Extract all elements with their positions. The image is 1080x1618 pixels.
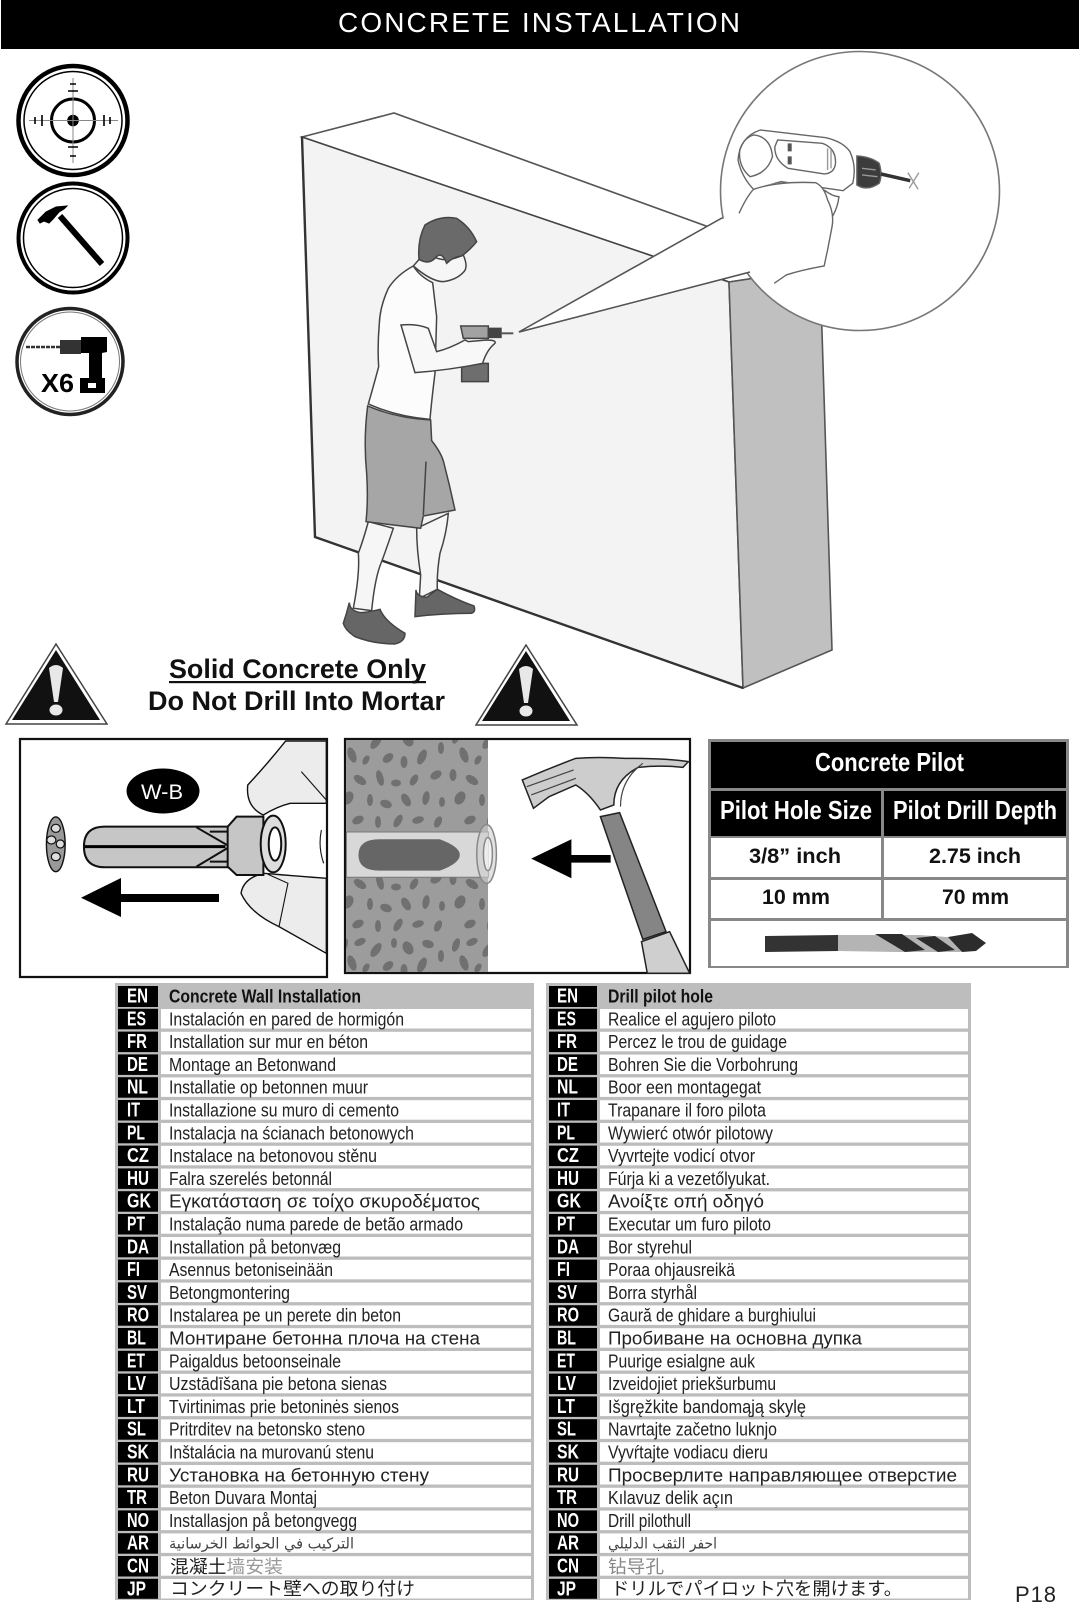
row RO: RO	[557, 1305, 579, 1327]
anchor body	[84, 822, 261, 870]
row ET: ET	[557, 1350, 575, 1372]
row FR: Percez le trou de guidage	[608, 1031, 787, 1052]
row SK	[549, 1442, 968, 1464]
row PT: Executar um furo piloto	[608, 1214, 771, 1234]
row EN: EN	[127, 986, 148, 1008]
row EN: Drill pilot hole	[608, 986, 713, 1006]
title banner	[1, 0, 1079, 49]
wall left edge	[302, 137, 743, 688]
arrow right panel	[531, 839, 611, 878]
row ET	[118, 1350, 531, 1372]
anchor collar	[228, 817, 263, 875]
warning heading	[148, 654, 445, 716]
legs	[353, 513, 448, 611]
title banner: CONCRETE INSTALLATION	[338, 7, 740, 38]
row DE: DE	[557, 1054, 578, 1076]
row SL	[549, 1419, 968, 1441]
shoes	[343, 589, 475, 644]
icon: target mark	[18, 66, 128, 175]
concrete cross-section	[346, 740, 488, 972]
row DA: DA	[557, 1236, 579, 1258]
row JP: コンクリート壁への取り付け	[170, 1579, 415, 1599]
fingers	[248, 741, 326, 815]
row AR	[118, 1533, 531, 1555]
value: 10 mm	[711, 880, 881, 918]
value: 2.75 inch	[884, 838, 1066, 877]
row LV	[118, 1373, 531, 1395]
row NO	[549, 1510, 968, 1532]
row GK	[118, 1191, 531, 1213]
warning heading: Do Not Drill Into Mortar	[148, 686, 445, 716]
row EN: Concrete Wall Installation	[169, 986, 361, 1006]
row JP	[118, 1578, 531, 1600]
hammer head	[522, 757, 688, 810]
row SV: Betongmontering	[169, 1282, 290, 1303]
row PL	[118, 1122, 531, 1144]
value: 70 mm	[884, 880, 1066, 918]
row IT	[549, 1100, 968, 1122]
row CN: CN	[127, 1556, 149, 1578]
row ET: ET	[127, 1350, 145, 1372]
row RO	[118, 1305, 531, 1327]
drilled hole	[46, 817, 65, 872]
face	[413, 255, 466, 282]
row PT: PT	[557, 1214, 575, 1236]
row NL	[549, 1077, 968, 1099]
row ES: Instalación en pared de hormigón	[169, 1008, 404, 1029]
row NO	[118, 1510, 531, 1532]
row GK	[549, 1191, 968, 1213]
value: 3/8 inch: 3/8” inch	[749, 845, 841, 868]
zoom cone	[519, 218, 750, 332]
row LT: Tvirtinimas prie betoninės sienos	[169, 1396, 399, 1417]
row JP: JP	[557, 1578, 576, 1600]
row NO: Installasjon på betongvegg	[169, 1510, 357, 1531]
table header: Concrete Pilot	[815, 747, 964, 777]
wall front face	[302, 137, 743, 688]
row LT: LT	[127, 1396, 145, 1418]
row AR: احفر الثقب الدليلي	[608, 1534, 717, 1554]
value: 3/8 inch	[711, 838, 881, 877]
table: concrete wall installation translations	[115, 983, 534, 1600]
row HU: Falra szerelés betonnál	[169, 1168, 332, 1189]
drill bit	[881, 174, 910, 181]
wall top face	[302, 113, 822, 282]
row PL: PL	[127, 1122, 145, 1144]
row SV: Borra styrhål	[608, 1282, 697, 1303]
row FR: FR	[557, 1031, 577, 1053]
row ES	[549, 1008, 968, 1030]
row LV: LV	[557, 1373, 577, 1395]
row CZ: CZ	[557, 1145, 579, 1167]
row PL: Wywierć otwór pilotowy	[608, 1122, 774, 1143]
row NO: Drill pilothull	[608, 1510, 691, 1531]
row LT: LT	[557, 1396, 575, 1418]
row FI: Poraa ohjausreikä	[608, 1259, 736, 1280]
row CZ: CZ	[127, 1145, 149, 1167]
row FI	[118, 1259, 531, 1281]
row LV: Izveidojiet priekšurbumu	[608, 1373, 776, 1394]
hammer grip	[641, 932, 690, 973]
row PT: Instalação numa parede de betão armado	[169, 1214, 463, 1234]
row DA	[549, 1236, 968, 1258]
row PL: PL	[557, 1122, 575, 1144]
row LT	[549, 1396, 968, 1418]
value: 2.75 inch: 2.75 inch	[929, 845, 1021, 868]
row FI: FI	[127, 1259, 140, 1281]
row TR: Kılavuz delik açın	[608, 1487, 733, 1508]
row PT	[549, 1214, 968, 1236]
badge: W-B: W-B	[141, 781, 183, 804]
warning heading: Solid Concrete Only	[169, 654, 426, 684]
row SL: Pritrditev na betonsko steno	[169, 1419, 365, 1440]
row LT: Išgręžkite bandomąją skylę	[608, 1396, 806, 1417]
warning icon right	[476, 645, 577, 725]
person drilling	[343, 217, 513, 644]
row BL: Пробиване на основна дупка	[608, 1328, 863, 1348]
row SL: Navrtajte začetno luknjo	[608, 1419, 777, 1440]
row HU: HU	[127, 1168, 149, 1190]
row DE	[549, 1054, 968, 1076]
icon: drill x6	[17, 308, 123, 414]
row AR: التركيب في الحوائط الخرسانية	[169, 1534, 354, 1554]
page number: P18	[1015, 1582, 1056, 1607]
row CZ: Vyvrtejte vodicí otvor	[608, 1145, 755, 1166]
hand	[654, 182, 833, 283]
row SV	[118, 1282, 531, 1304]
row FR	[118, 1031, 531, 1053]
row DE	[118, 1054, 531, 1076]
row ET	[549, 1350, 968, 1372]
badge: W-B	[126, 768, 200, 814]
panel: hammering anchor into concrete	[345, 739, 690, 973]
row ES: Realice el agujero piloto	[608, 1008, 776, 1029]
row NL: NL	[557, 1077, 578, 1099]
row ES	[118, 1008, 531, 1030]
row PL: Instalacja na ścianach betonowych	[169, 1122, 414, 1143]
row SK: SK	[127, 1442, 149, 1464]
row DA: Installation på betonvæg	[169, 1236, 341, 1257]
row DE: Bohren Sie die Vorbohrung	[608, 1054, 798, 1075]
row DA: Bor styrehul	[608, 1236, 692, 1257]
row CN: 混凝土墙安装	[170, 1557, 283, 1577]
row AR	[549, 1533, 968, 1555]
row NL: Boor een montagegat	[608, 1077, 761, 1098]
row RO: RO	[127, 1305, 149, 1327]
row EN: EN	[557, 986, 578, 1008]
row HU: HU	[557, 1168, 579, 1190]
row IT: IT	[557, 1100, 570, 1122]
row SV	[549, 1282, 968, 1304]
row BL	[118, 1328, 531, 1350]
row JP	[549, 1578, 968, 1600]
row JP: JP	[127, 1578, 146, 1600]
row SL: SL	[557, 1419, 576, 1441]
row DE: Montage an Betonwand	[169, 1054, 336, 1075]
row BL: BL	[557, 1328, 576, 1350]
anchor in hole	[346, 832, 488, 877]
column head: hole size: Pilot Hole Size	[720, 795, 872, 825]
row BL: Монтиране бетонна плоча на стена	[169, 1328, 481, 1348]
row ES: ES	[557, 1008, 576, 1030]
column head: hole size	[711, 791, 881, 836]
row FI	[549, 1259, 968, 1281]
arm	[401, 325, 495, 373]
row ES: ES	[127, 1008, 146, 1030]
row TR	[118, 1487, 531, 1509]
row RO: Instalarea pe un perete din beton	[169, 1305, 401, 1326]
row SK: SK	[557, 1442, 579, 1464]
row PL	[549, 1122, 968, 1144]
row SL	[118, 1419, 531, 1441]
row RO: Gaură de ghidare a burghiului	[608, 1305, 816, 1326]
row CN: CN	[557, 1556, 579, 1578]
table header	[711, 742, 1066, 788]
row NO: NO	[127, 1510, 149, 1532]
row FR: FR	[127, 1031, 147, 1053]
row DA: DA	[127, 1236, 149, 1258]
panel: inserting wall anchor	[20, 739, 327, 977]
wall side face	[729, 268, 832, 688]
row CZ	[549, 1145, 968, 1167]
row FR: Installation sur mur en béton	[169, 1031, 368, 1052]
row LV: Uzstādīšana pie betona sienas	[169, 1373, 387, 1394]
row AR: AR	[557, 1533, 579, 1555]
shirt	[368, 266, 437, 419]
row ET: Puurige esialgne auk	[608, 1350, 756, 1371]
drill bit picture	[711, 921, 1066, 966]
table: concrete pilot	[708, 739, 1069, 968]
row RU: RU	[127, 1464, 149, 1486]
row GK: Εγκατάσταση σε τοίχο σκυροδέματος	[169, 1192, 480, 1212]
row GK: GK	[557, 1191, 581, 1213]
table: drill pilot hole translations	[546, 983, 971, 1600]
row BL: BL	[127, 1328, 146, 1350]
row CZ	[118, 1145, 531, 1167]
row SK	[118, 1442, 531, 1464]
row RU: Просверлите направляющее отверстие	[608, 1465, 957, 1485]
row TR: TR	[557, 1487, 577, 1509]
row HU: Fúrja ki a vezetőlyukat.	[608, 1168, 770, 1189]
row SK: Vyvŕtajte vodiacu dieru	[608, 1442, 768, 1462]
row CN: 钻导孔	[608, 1557, 664, 1577]
row DA	[118, 1236, 531, 1258]
row EN	[118, 986, 361, 1008]
value: 10 mm: 10 mm	[762, 886, 830, 909]
row SK: Inštalácia na murovanú stenu	[169, 1442, 374, 1462]
row TR	[549, 1487, 968, 1509]
row CZ: Instalace na betonovou stěnu	[169, 1145, 377, 1166]
row NL: NL	[127, 1077, 148, 1099]
column head: drill depth	[884, 791, 1066, 836]
shorts	[365, 406, 455, 528]
row SV: SV	[557, 1282, 577, 1304]
row RU: RU	[557, 1464, 579, 1486]
row RU: Установка на бетонную стену	[169, 1465, 429, 1485]
row NL	[118, 1077, 531, 1099]
icon: drill x6: X6	[41, 368, 74, 398]
row SV: SV	[127, 1282, 147, 1304]
row LV	[549, 1373, 968, 1395]
magnified detail circle	[519, 52, 1000, 332]
row PT: PT	[127, 1214, 145, 1236]
drill	[461, 326, 488, 338]
row CN	[549, 1556, 968, 1578]
drill body	[738, 130, 854, 191]
row CN	[118, 1556, 531, 1578]
row HU	[549, 1168, 968, 1190]
row HU	[118, 1168, 531, 1190]
row DE: DE	[127, 1054, 148, 1076]
row RO	[549, 1305, 968, 1327]
arrow left	[81, 878, 219, 917]
row IT: Trapanare il foro pilota	[608, 1100, 767, 1120]
icon: hammer	[18, 184, 128, 292]
row ET: Paigaldus betoonseinale	[169, 1350, 341, 1371]
wall illustration	[302, 113, 832, 688]
row FI: Asennus betoniseinään	[169, 1259, 333, 1280]
value: 70 mm: 70 mm	[942, 886, 1009, 909]
hammer handle	[600, 813, 666, 939]
row JP: ドリルでパイロット穴を開けます。	[611, 1579, 902, 1599]
row IT: IT	[127, 1100, 140, 1122]
hair	[419, 217, 477, 263]
row TR: TR	[127, 1487, 147, 1509]
row IT: Installazione su muro di cemento	[169, 1100, 399, 1120]
row AR: AR	[127, 1533, 149, 1555]
row RU	[118, 1464, 531, 1486]
row SL: SL	[127, 1419, 146, 1441]
row LV: LV	[127, 1373, 147, 1395]
row NL: Installatie op betonnen muur	[169, 1077, 368, 1098]
warning icon left	[6, 644, 107, 724]
chuck	[857, 156, 881, 188]
row IT	[118, 1100, 531, 1122]
row EN	[549, 986, 713, 1008]
row GK: Ανοίξτε οπή οδηγό	[608, 1192, 764, 1212]
row LT	[118, 1396, 531, 1418]
row GK: GK	[127, 1191, 151, 1213]
row FI: FI	[557, 1259, 570, 1281]
row TR: Beton Duvara Montaj	[169, 1487, 317, 1508]
row NO: NO	[557, 1510, 579, 1532]
row FR	[549, 1031, 968, 1053]
row BL	[549, 1328, 968, 1350]
